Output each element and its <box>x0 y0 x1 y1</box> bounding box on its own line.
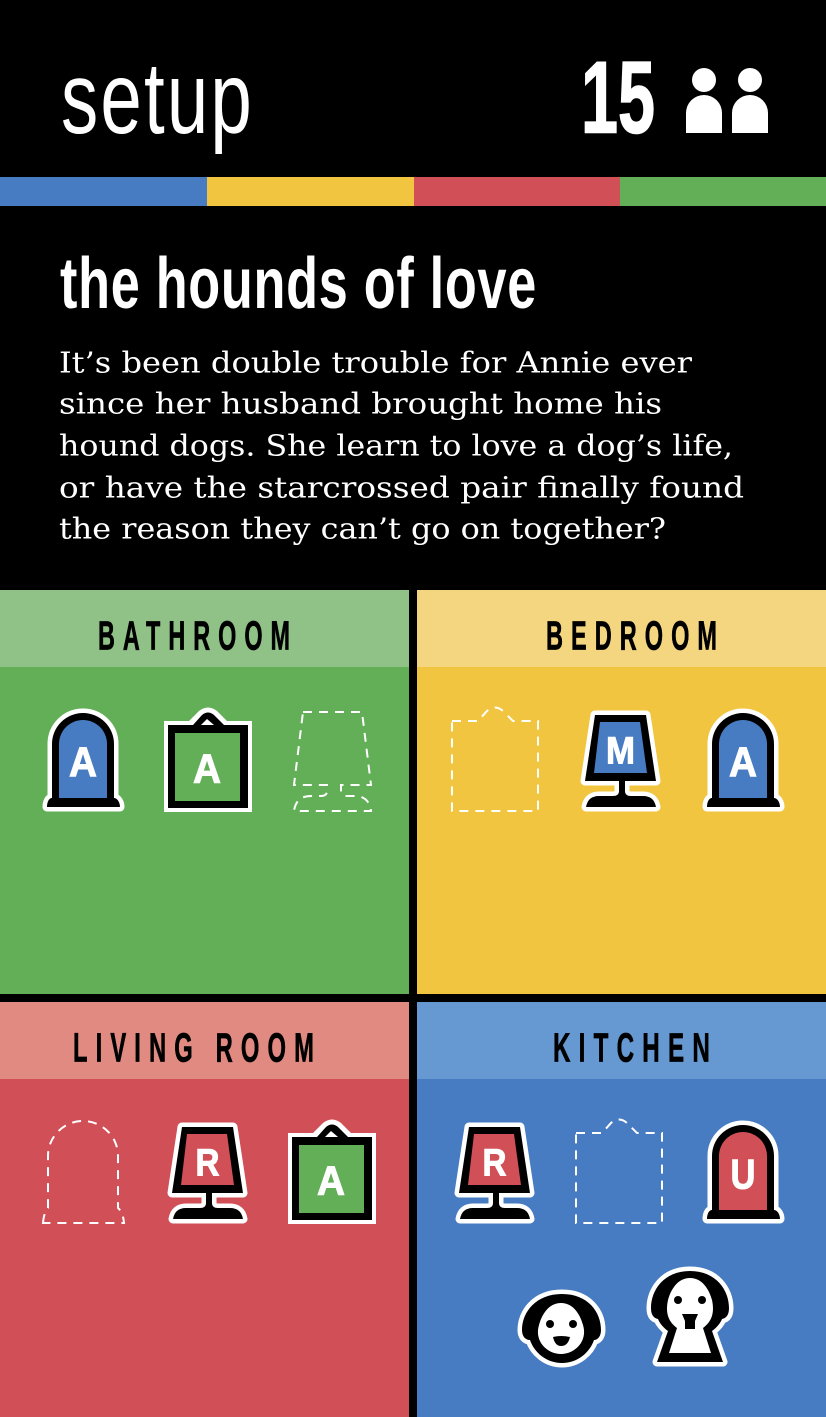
icon: empty tombstone slot <box>43 1121 124 1223</box>
icon: tombstone U: U <box>730 1150 756 1198</box>
icon: picture frame A: A <box>193 746 221 792</box>
icon: picture frame A: A <box>317 1158 345 1204</box>
icon: tombstone A: A <box>729 738 757 786</box>
heading: kitchen: KITCHEN <box>553 1024 718 1070</box>
icon: empty lamp slot <box>294 712 371 811</box>
panel: kitchen <box>417 1002 826 1417</box>
panel: bathroom <box>0 590 409 994</box>
icon: tombstone A <box>47 713 120 807</box>
icon: tombstone U <box>707 1125 780 1219</box>
icon: picture frame A <box>164 708 252 812</box>
icon: dog with body <box>651 1271 729 1362</box>
icon: empty frame slot <box>576 1120 662 1223</box>
icon: tombstone A <box>707 713 780 807</box>
heading: setup: setup <box>61 41 254 155</box>
story text: It’s been double trouble for Annie ever <box>59 346 692 380</box>
heading: bathroom: BATHROOM <box>98 612 298 658</box>
panel: bedroom <box>417 590 826 994</box>
heading: living room: LIVING ROOM <box>73 1024 322 1070</box>
icon: two people <box>686 68 768 133</box>
story text <box>59 346 744 546</box>
icon: lamp M: M <box>606 730 635 772</box>
story text: hound dogs. She learn to love a dog’s life, <box>59 430 733 462</box>
icon: lamp R: R <box>482 1142 506 1184</box>
icon: picture frame A <box>288 1120 376 1224</box>
icon: lamp R <box>172 1127 243 1219</box>
story text: or have the starcrossed pair finally found <box>59 472 744 504</box>
icon: dog head <box>522 1294 601 1363</box>
icon: lamp R: R <box>196 1142 220 1184</box>
colour strip <box>0 177 826 206</box>
title: the hounds of love <box>60 244 537 324</box>
icon: lamp M <box>585 715 656 807</box>
icon: lamp R <box>459 1127 530 1219</box>
icon: tombstone A: A <box>69 738 97 786</box>
icon: empty frame slot <box>452 708 538 811</box>
vertical divider <box>409 590 417 1417</box>
player count: 15: 15 <box>581 40 655 154</box>
story text: since her husband brought home his <box>59 388 662 420</box>
story text: the reason they can’t go on together? <box>59 512 666 546</box>
panel: living room <box>0 1002 409 1417</box>
